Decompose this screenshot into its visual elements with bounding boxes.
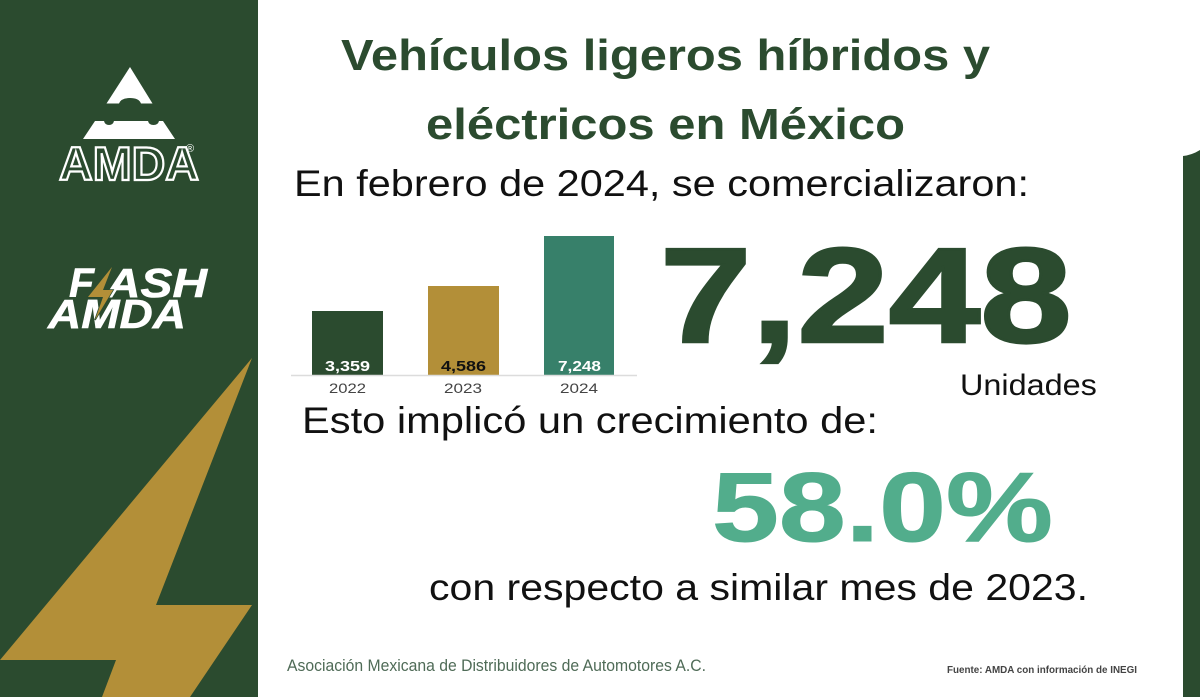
- text: growth sentence: Esto implicó un crecimiento de:: [302, 400, 878, 441]
- bar: 2023: 4,586: [441, 359, 486, 375]
- right edge strip: [1183, 150, 1200, 697]
- footer: source: Fuente: AMDA con información de INEGI: [947, 664, 1137, 676]
- bar: 2022: [312, 311, 383, 396]
- big number: units: 7,248: [660, 220, 1072, 371]
- text: units label: Unidades: [960, 368, 1097, 402]
- flash wordmark: letters ASH: ASH: [105, 260, 209, 306]
- bar: 2023: 2023: [444, 380, 482, 396]
- icon: Flash AMDA logo: [47, 260, 209, 337]
- title line 1: Vehículos ligeros híbridos y: [341, 31, 991, 80]
- logo: registered mark: ®: [186, 143, 194, 155]
- bar: 2022: 3,359: [325, 359, 370, 375]
- flash wordmark: letter F: F: [69, 260, 95, 306]
- logo: top peak: [106, 67, 152, 104]
- panel: left sidebar: [0, 0, 258, 697]
- icon: large gold lightning bolt: [0, 358, 252, 697]
- footer: organization name: Asociación Mexicana de Distribuidores de Automotores A.C.: [287, 657, 706, 675]
- title line 2: eléctricos en México: [426, 100, 905, 149]
- bar: 2022: 2022: [329, 380, 366, 396]
- flash wordmark: gold bolt: [88, 267, 113, 320]
- big number: growth percent: 58.0%: [712, 453, 1053, 562]
- logo: AMDA wordmark: AMDA: [59, 137, 199, 190]
- text: comparison sentence: con respecto a similar mes de 2023.: [429, 567, 1088, 608]
- flash wordmark: AMDA: AMDA: [47, 291, 186, 337]
- bar: 2024: [544, 236, 614, 396]
- text: intro sentence: En febrero de 2024, se comercializaron:: [294, 163, 1029, 204]
- bar: 2024: 2024: [560, 380, 598, 396]
- title: [341, 31, 991, 149]
- bar: 2023: [428, 286, 499, 396]
- logo: middle band: [83, 121, 175, 139]
- sidebar background: [0, 0, 258, 697]
- icon: AMDA logo: [59, 67, 199, 190]
- bar: 2024: 7,248: [558, 359, 601, 375]
- bar chart: [291, 236, 637, 396]
